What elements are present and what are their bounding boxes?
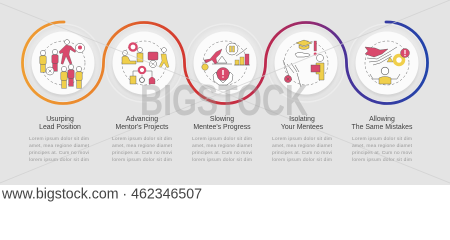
text block 3: principes at. Cum no movi xyxy=(192,150,252,156)
text block 4: amet, mea regione diamet xyxy=(272,143,333,149)
heading: slowing mentee's progress: Slowing xyxy=(210,116,234,123)
watermark: large word: BIGSTOCK xyxy=(140,76,308,125)
gradient wave line xyxy=(22,22,428,104)
text block 5: lorem ipsum dolor sit dim xyxy=(352,157,412,163)
text block 3: amet, mea regione diamet xyxy=(192,143,253,149)
heading: advancing mentor's projects: Advancing xyxy=(126,116,158,123)
icon: advancing mentor's projects xyxy=(122,41,169,85)
heading: usurping lead position: Usurping xyxy=(46,116,74,123)
text block 5: Lorem ipsum dolor sit dim xyxy=(352,136,412,142)
heading: isolating your mentees: Isolating xyxy=(289,116,315,123)
icon: slowing mentee's progress xyxy=(202,41,250,85)
text block 4 xyxy=(272,136,333,163)
heading: allowing the same mistakes: The Same Mistakes xyxy=(352,124,413,131)
text block 3 xyxy=(192,136,253,163)
footer strip xyxy=(0,185,450,205)
text block 2: lorem ipsum dolor sit dim xyxy=(112,157,172,163)
text block 1: principes at. Cum no movi xyxy=(29,150,89,156)
text block 1: Lorem ipsum dolor sit dim xyxy=(29,136,89,142)
text block 2: amet, mea regione diamet xyxy=(112,143,173,149)
icon: allowing the same mistakes xyxy=(365,41,410,85)
heading: advancing mentor's projects: Mentor's Projects xyxy=(115,124,169,131)
text block 2 xyxy=(112,136,173,163)
text block 4: principes at. Cum no movi xyxy=(272,150,332,156)
text block 5: amet, mea regione diamet xyxy=(352,143,413,149)
background xyxy=(0,0,450,185)
icon: isolating your mentees xyxy=(283,40,328,87)
text block 4: Lorem ipsum dolor sit dim xyxy=(272,136,332,142)
heading: usurping lead position: Lead Position xyxy=(39,124,81,131)
text block 5: principes at. Cum no movi xyxy=(352,150,412,156)
text block 3: Lorem ipsum dolor sit dim xyxy=(192,136,252,142)
watermark: diagonal lines xyxy=(0,0,450,183)
text block 1: lorem ipsum dolor sit dim xyxy=(29,157,89,163)
panel: circle discs xyxy=(24,24,426,102)
heading: allowing the same mistakes: Allowing xyxy=(369,116,395,123)
heading: isolating your mentees: Your Mentees xyxy=(281,124,324,131)
text block 2: Lorem ipsum dolor sit dim xyxy=(112,136,172,142)
icon: usurping lead position xyxy=(40,40,85,88)
text block 2: principes at. Cum no movi xyxy=(112,150,172,156)
text block 5 xyxy=(352,136,413,163)
text block 1 xyxy=(29,136,90,163)
text block 1: amet, mea regione diamet xyxy=(29,143,90,149)
footer source text: www.bigstock.com · 462346507 xyxy=(1,186,202,202)
text block 3: lorem ipsum dolor sit dim xyxy=(192,157,252,163)
heading: slowing mentee's progress: Mentee's Progress xyxy=(193,124,251,131)
text block 4: lorem ipsum dolor sit dim xyxy=(272,157,332,163)
